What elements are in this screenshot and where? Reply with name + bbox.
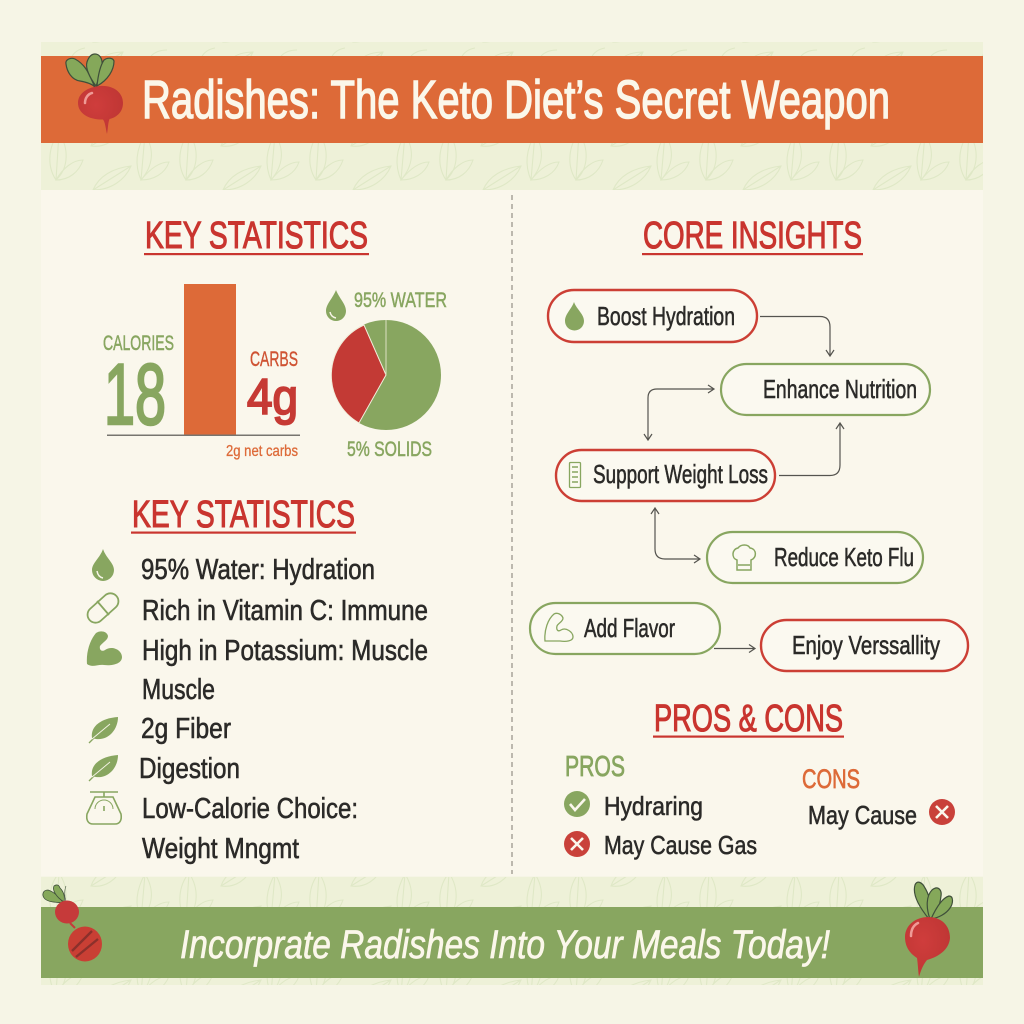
bar chart: calories and carbs: 4g — [247, 369, 298, 425]
text: vitamin c: Rich in Vitamin C: Immune — [142, 595, 428, 627]
footer banner — [41, 907, 983, 978]
pill: boost hydration: Boost Hydration — [597, 301, 735, 331]
icon: leaf — [89, 755, 118, 781]
heading: key statistics: KEY STATISTICS — [145, 215, 368, 257]
pill: support weight loss — [556, 450, 775, 501]
text: low calorie: Low-Calorie Choice: — [142, 793, 358, 825]
footer text: Incorprate Radishes Into Your Meals Today! — [180, 923, 830, 967]
cons list: CONS — [802, 764, 860, 794]
text: low calorie: Weight Mngmt — [142, 833, 299, 865]
icon: capsule — [84, 590, 122, 626]
pill: enhance nutrition — [721, 364, 930, 415]
text: potassium: Muscle — [142, 674, 215, 706]
cons list — [802, 764, 955, 830]
bar chart: calories and carbs — [103, 284, 300, 460]
pill: enhance nutrition: Enhance Nutrition — [763, 374, 917, 404]
bottom patterned band — [41, 877, 983, 985]
pros list — [564, 751, 757, 860]
heading: core insights: CORE INSIGHTS — [643, 215, 862, 257]
icon: water drop list — [92, 549, 114, 581]
pill: enjoy versatility: Enjoy Verssallity — [792, 630, 940, 660]
text: hydration: 95% Water: Hydration — [141, 554, 375, 586]
icon: flexed arm — [87, 631, 122, 666]
pill: add flavor — [530, 603, 720, 654]
text: potassium — [142, 635, 428, 706]
pie chart: water and solids — [331, 289, 447, 461]
icon: kitchen scale — [87, 792, 121, 824]
icon: water drop — [326, 290, 346, 321]
bar chart: calories and carbs: CARBS — [250, 348, 298, 371]
icon: footer left radish — [43, 885, 102, 962]
bar chart: calories and carbs: CALORIES — [103, 332, 174, 355]
heading: pros and cons: PROS & CONS — [654, 698, 843, 740]
pill: enjoy versatility — [761, 620, 968, 671]
top patterned band — [41, 42, 983, 190]
text: potassium: High in Potassium: Muscle — [142, 635, 428, 667]
pros list: PROS — [565, 751, 625, 783]
bar chart: calories and carbs: 2g net carbs — [226, 443, 298, 460]
arrows: flow connectors — [644, 316, 844, 652]
cons list: May Cause — [808, 800, 917, 830]
bar chart: calories and carbs: 18 — [104, 347, 166, 443]
heading: key statistics list: KEY STATISTICS — [132, 494, 355, 536]
icon: leaf — [89, 717, 118, 743]
icon: footer right radish — [905, 882, 952, 977]
pros list: Hydraring — [604, 791, 703, 821]
pill: reduce keto flu — [707, 532, 923, 583]
content panel — [41, 190, 983, 876]
pill: reduce keto flu: Reduce Keto Flu — [774, 542, 914, 572]
pie chart: water and solids: 5% SOLIDS — [347, 438, 432, 461]
pill: support weight loss: Support Weight Loss — [593, 459, 768, 489]
pill: boost hydration — [548, 290, 757, 342]
text: fiber: 2g Fiber — [141, 713, 231, 745]
pill: add flavor: Add Flavor — [584, 613, 675, 643]
text: digestion: Digestion — [139, 753, 240, 785]
pie chart: water and solids: 95% WATER — [354, 289, 447, 312]
text: low calorie — [142, 793, 358, 865]
pros list: May Cause Gas — [604, 830, 757, 860]
icon: header radish — [66, 54, 123, 134]
header banner — [41, 56, 983, 143]
